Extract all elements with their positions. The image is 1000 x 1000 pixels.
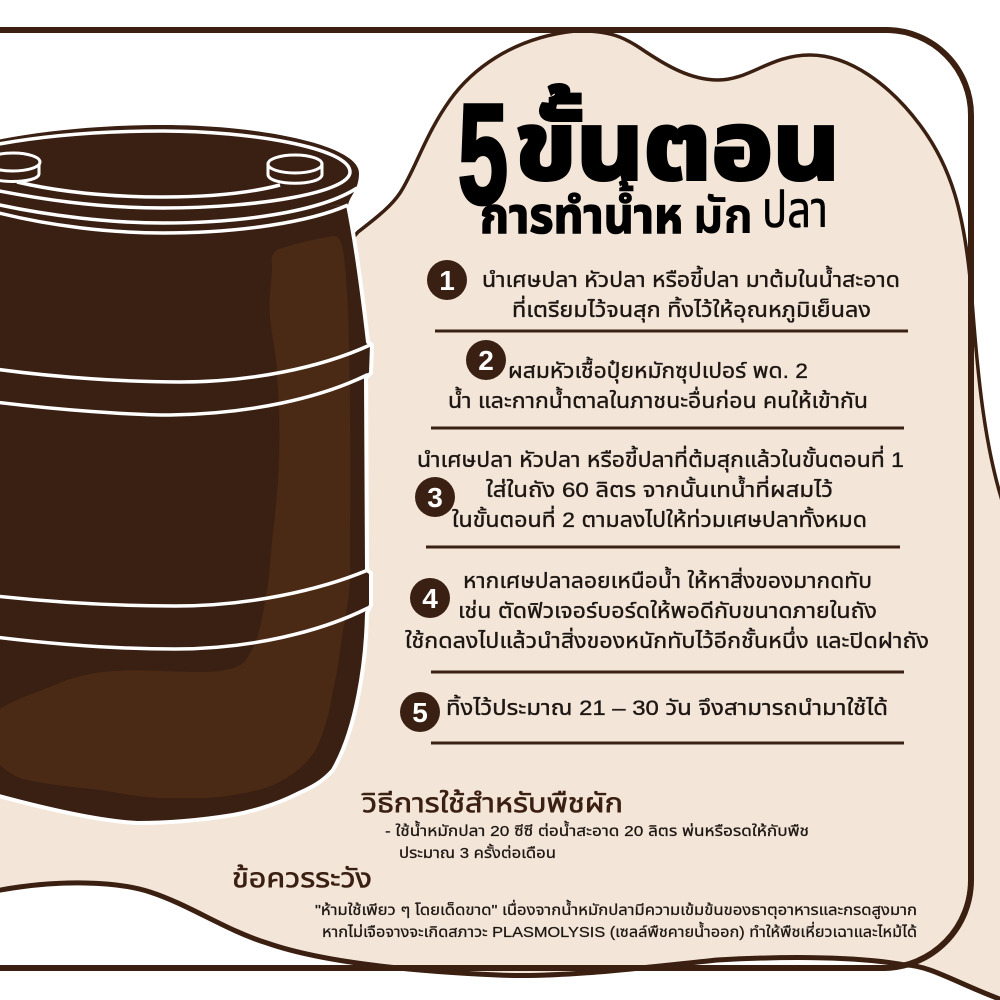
right cap [268,155,322,183]
step 1 badge [427,260,467,300]
warning text: "ห้ามใช้เพียว ๆ โดยเด็ดขาด" เนื่องจากน้ำหมักปลามีความเข้มข้นของธาตุอาหารและกรดสูงมาก [315,899,917,919]
title: ขั้นตอน [515,84,840,199]
usage text [385,820,809,862]
step 1 [427,260,900,323]
step 2 text: น้ำ และกากน้ำตาลในภาชนะอื่นก่อน คนให้เข้ากัน [448,386,868,413]
step 2 [448,340,868,413]
left cap [0,153,40,182]
step 2 text: ผสมหัวเชื้อปุ๋ยหมักซุปเปอร์ พด. 2 [508,356,808,384]
divider 1 [435,330,908,332]
step 2 text [448,356,868,413]
usage text: - ใช้น้ำหมักปลา 20 ซีซี ต่อน้ำสะอาด 20 ลิตร พ่นหรือรดให้กับพืช [385,820,809,840]
blob bottom outline [0,883,1000,1000]
step 3 badge: 3 [427,482,443,513]
step 5 badge [400,692,440,732]
step 4 badge: 4 [422,583,438,614]
divider 3 [426,546,900,548]
barrel lid [0,125,359,215]
heading: usage for vegetables: วิธีการใช้สำหรับพืชผัก [361,788,623,818]
heading: precautions: ข้อควรระวัง [232,863,372,893]
step 3 text: นำเศษปลา หัวปลา หรือขี้ปลาที่ต้มสุกแล้วในขั้นตอนที่ 1 [417,445,904,473]
divider 2 [431,426,904,430]
step 1 text: ที่เตรียมไว้จนสุก ทิ้งไว้ให้อุณหภูมิเย็นลง [512,295,871,323]
step 4 text: ใช้กดลงไปแล้วนำสิ่งของหนักทับไว้อีกชั้นหนึ่ง และปิดฝาถัง [405,626,929,653]
band lines [0,345,370,649]
divider 4 [431,670,904,674]
step 3 text: ในขั้นตอนที่ 2 ตามลงไปให้ท่วมเศษปลาทั้งหมด [452,505,867,532]
step 4 text: เช่น ตัดฟิวเจอร์บอร์ดให้พอดีกับขนาดภายในถัง [458,599,877,623]
step 5 [400,692,888,732]
step 1 text [482,265,900,323]
warning text: หากไม่เจือจางจะเกิดสภาวะ PLASMOLYSIS (เซลล์พืชคายน้ำออก) ทำให้พืชเหี่ยวเฉาและไหม้ได้ [322,921,917,941]
step 3 [415,445,904,532]
barrel body [0,190,372,823]
step 4 text [405,566,929,653]
step 5 text: ทิ้งไว้ประมาณ 21 – 30 วัน จึงสามารถนำมาใช้ได้ [446,694,888,720]
step 3 badge [415,477,455,517]
step 4 badge [410,578,450,618]
warning text [315,899,917,941]
subtitle: มัก [693,188,753,244]
step 1 text: นำเศษปลา หัวปลา หรือขี้ปลา มาต้มในน้ำสะอาด [482,265,900,292]
step 5 badge: 5 [412,697,428,728]
step 3 text [417,445,904,532]
barrel highlight [0,236,350,798]
title [458,75,840,234]
step 4 [405,566,929,653]
step 2 badge [466,340,506,380]
step 1 badge: 1 [439,265,455,296]
subtitle: การทำน้ำห [480,181,683,244]
step 4 text: หากเศษปลาลอยเหนือน้ำ ให้หาสิ่งของมากดทับ [463,566,872,593]
icon: barrel [0,125,372,823]
subtitle: ปลา [762,182,828,238]
step 3 text: ใส่ในถัง 60 ลิตร จากนั้นเทน้ำที่ผสมไว้ [486,475,833,502]
divider 5 [431,742,904,744]
title: 5 [458,75,508,234]
step 2 badge: 2 [478,345,494,376]
subtitle [480,181,828,244]
usage text: ประมาณ 3 ครั้งต่อเดือน [399,843,556,862]
